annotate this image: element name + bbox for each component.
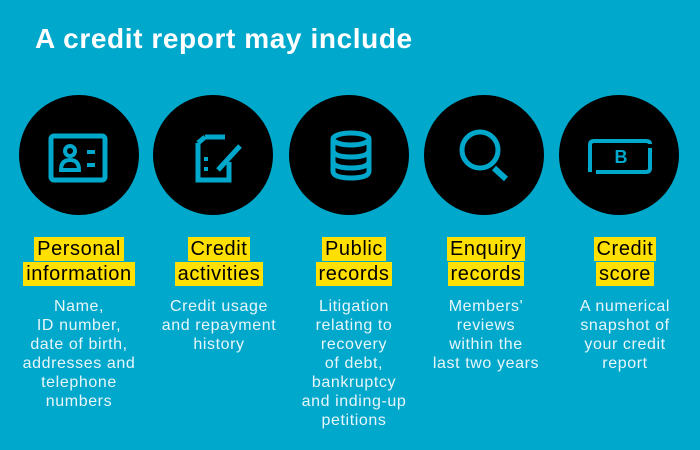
column: credit score: your credit	[584, 336, 666, 353]
icon: score card	[559, 95, 679, 215]
column: public records: Public	[325, 238, 383, 260]
column: enquiry records: Enquiry	[450, 238, 522, 260]
column: public records: bankruptcy	[312, 374, 396, 391]
column: public records: Litigation	[319, 298, 389, 315]
icon: database	[289, 95, 409, 215]
column: public records: recovery	[321, 336, 387, 353]
column: public records: relating to	[316, 317, 392, 334]
column: credit score	[580, 237, 670, 372]
title: A credit report may include	[35, 23, 413, 54]
column: credit score: report	[602, 355, 648, 372]
icons row	[19, 95, 679, 215]
column: enquiry records: reviews	[457, 317, 515, 334]
column: credit activities: history	[193, 336, 245, 353]
column: personal information: Name,	[54, 298, 104, 315]
column: enquiry records: Members'	[449, 298, 523, 315]
column: credit activities: Credit usage	[170, 298, 268, 315]
column: public records: petitions	[322, 412, 386, 429]
icon: document with pen	[153, 95, 273, 215]
column: enquiry records: within the	[449, 336, 523, 353]
column: public records: of debt,	[325, 355, 383, 372]
column: credit activities: Credit	[191, 238, 247, 260]
column: credit activities: activities	[178, 262, 260, 284]
column: personal information: telephone	[41, 374, 117, 391]
column: public records: and inding-up	[302, 393, 406, 410]
column: personal information: information	[26, 262, 132, 284]
column: credit activities	[162, 237, 276, 353]
column: credit score: Credit	[597, 238, 653, 260]
icon: magnifier	[424, 95, 544, 215]
column: credit score: score	[599, 262, 651, 284]
icon: ID card	[19, 95, 139, 215]
column: public records: records	[319, 262, 389, 284]
column: credit score: snapshot of	[580, 317, 670, 334]
column: personal information: ID number,	[37, 317, 121, 334]
column: personal information	[23, 237, 135, 410]
column: credit score: A numerical	[580, 298, 670, 315]
column: enquiry records: last two years	[433, 355, 539, 372]
icon: score card: B	[614, 147, 628, 167]
column: personal information: numbers	[46, 393, 112, 410]
column: personal information: Personal	[37, 238, 121, 260]
column: enquiry records: records	[451, 262, 521, 284]
column: personal information: addresses and	[23, 355, 135, 372]
column: credit activities: and repayment	[162, 317, 276, 334]
column: personal information: date of birth,	[30, 336, 128, 353]
column: public records	[302, 237, 406, 429]
column: enquiry records	[433, 237, 539, 372]
